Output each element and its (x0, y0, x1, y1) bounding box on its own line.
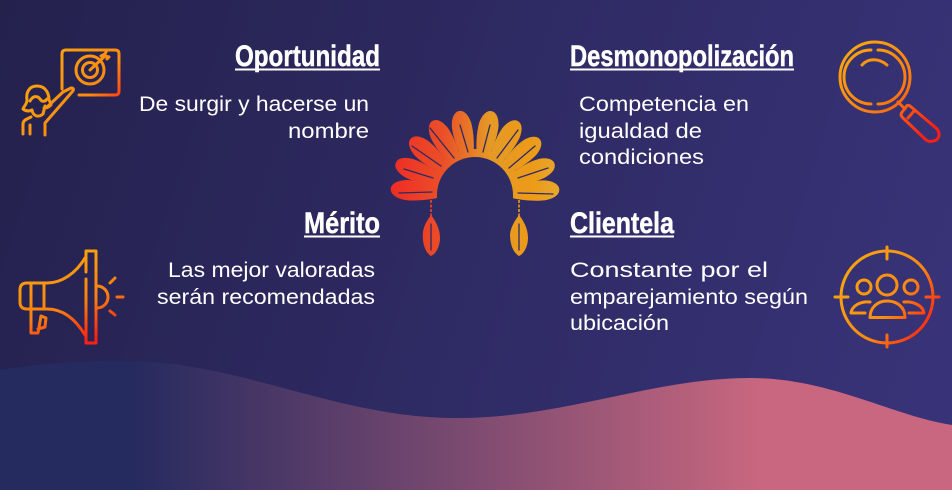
text: Clientela: emparejamiento según (570, 286, 808, 309)
icon: feather headdress (390, 110, 560, 256)
text: Oportunidad: De surgir y hacerse un (139, 93, 369, 116)
heading: Mérito: Mérito (304, 207, 380, 240)
icon: megaphone (20, 251, 123, 343)
text: Desmonopolización: igualdad de (579, 120, 702, 143)
text: Oportunidad (139, 93, 369, 143)
icon: audience in crosshair (835, 247, 939, 347)
icon: magnifying glass (840, 42, 939, 141)
text: Mérito: serán recomendadas (157, 286, 375, 309)
text: Clientela (570, 259, 808, 335)
text: Desmonopolización: Competencia en (579, 93, 749, 116)
text: Desmonopolización (579, 93, 749, 169)
wave (0, 361, 952, 490)
text: Desmonopolización: condiciones (579, 146, 704, 169)
text: Mérito: Las mejor valoradas (168, 259, 375, 282)
text: Oportunidad: nombre (288, 120, 369, 143)
text: Mérito (157, 259, 375, 309)
text: Clientela: ubicación (570, 312, 669, 335)
text: Clientela: Constante por el (570, 259, 768, 282)
heading: Desmonopolización: Desmonopolización (570, 40, 794, 73)
heading: Clientela: Clientela (570, 207, 674, 240)
icon: presenter with target (23, 50, 119, 135)
heading: Oportunidad: Oportunidad (235, 40, 380, 73)
